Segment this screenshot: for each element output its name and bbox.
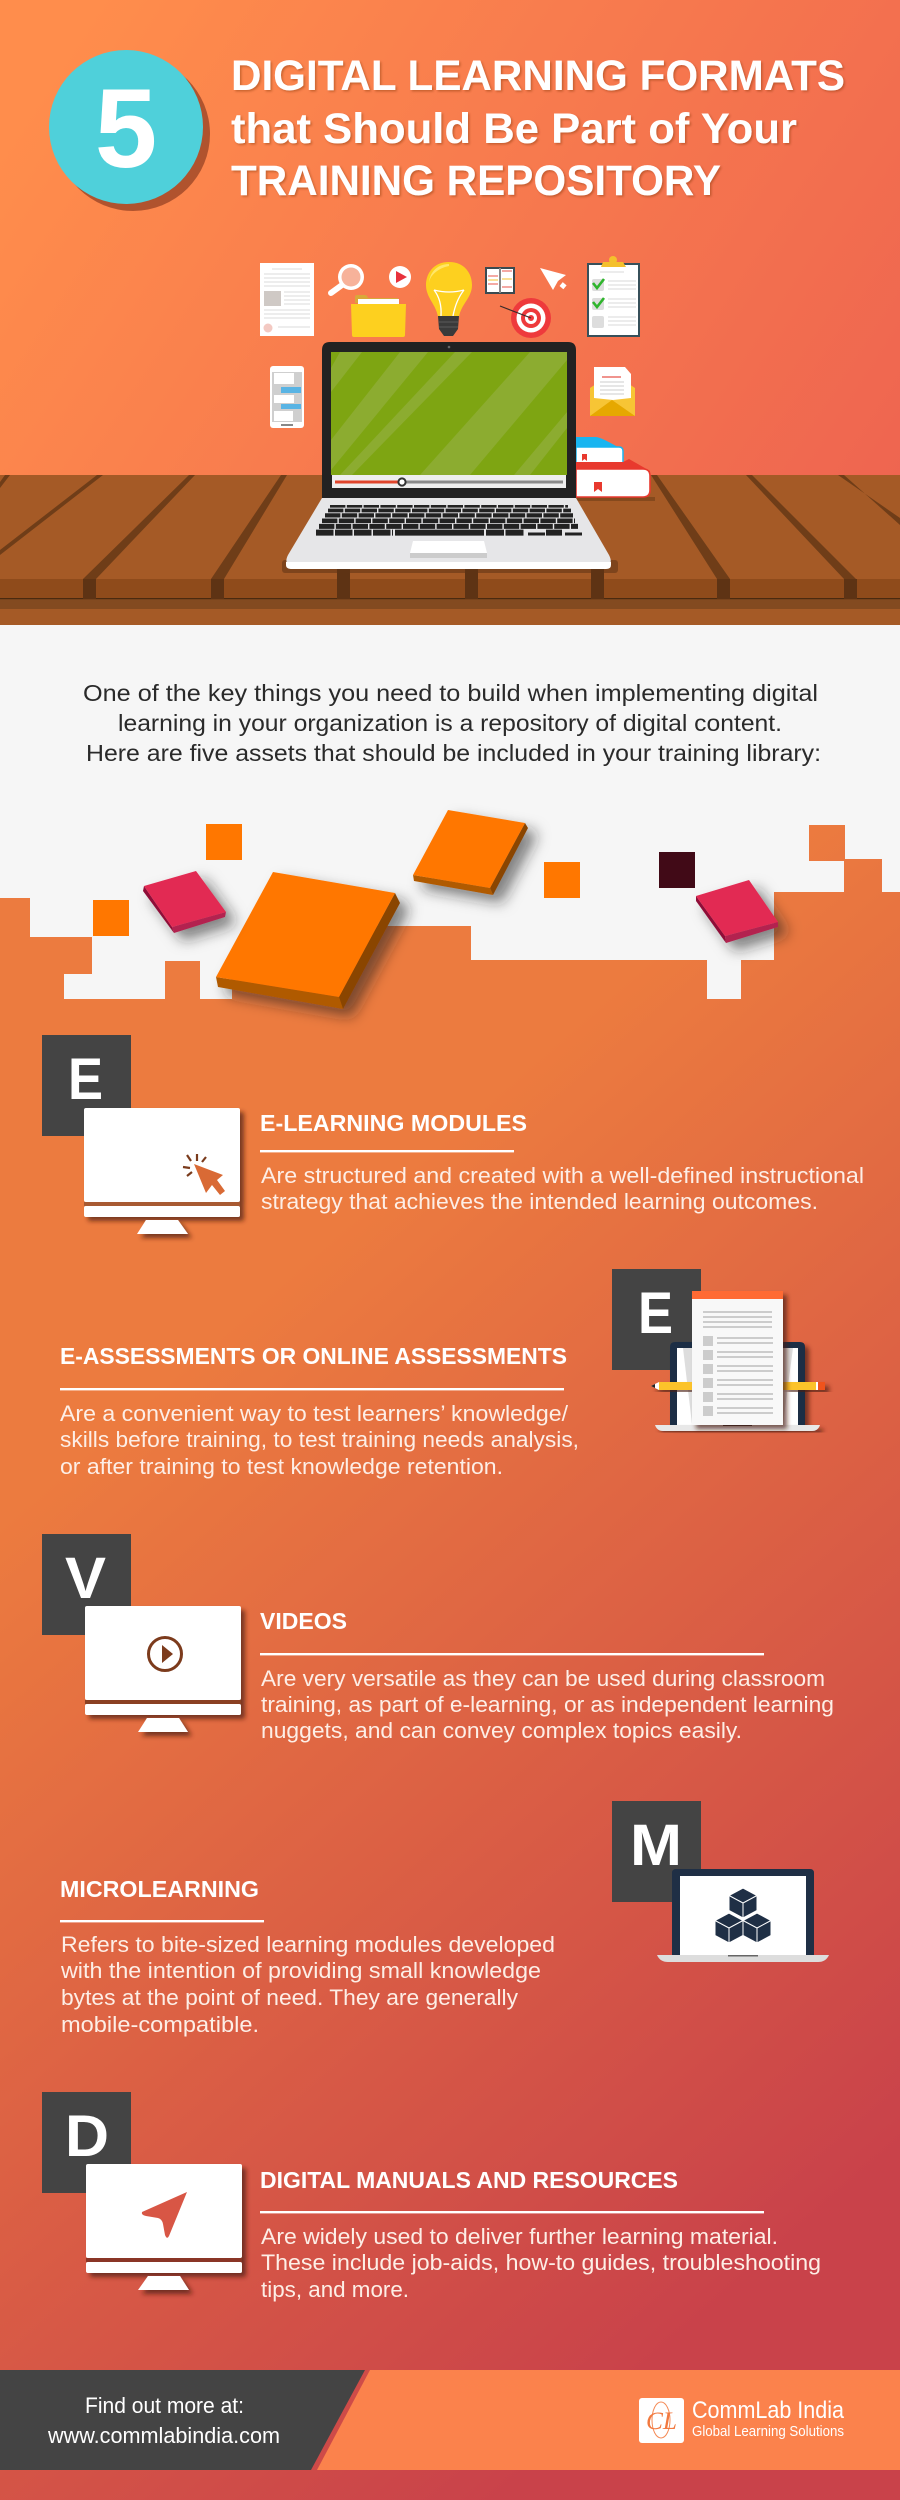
heading: E-LEARNING MODULES: [260, 1110, 527, 1136]
description: [60, 1932, 555, 2037]
letter tile E: [612, 1269, 701, 1370]
description: bytes at the point of need. They are generally: [61, 1985, 518, 2010]
description: Refers to bite-sized learning modules developed: [61, 1932, 555, 1957]
icon: open book: [486, 268, 514, 293]
description: [261, 1666, 834, 1743]
wooden desk: [0, 475, 900, 625]
title: that Should Be Part of Your: [231, 105, 797, 153]
description: strategy that achieves the intended learning outcomes.: [261, 1189, 818, 1214]
footer: call to action: [0, 2370, 365, 2470]
intro text: [83, 680, 821, 766]
3D block: large orange: [216, 872, 400, 1009]
footer: call to action: www.commlabindia.com: [47, 2423, 280, 2448]
floating squares: [93, 824, 695, 936]
description: [261, 1163, 864, 1214]
heading: E-ASSESSMENTS OR ONLINE ASSESSMENTS: [60, 1343, 567, 1369]
heading: MICROLEARNING: [60, 1876, 259, 1902]
title: [231, 52, 845, 205]
icon: cursor: [540, 268, 567, 290]
panel: digital manuals and resources: [42, 2092, 821, 2302]
3D block: pink right: [696, 880, 778, 943]
letter tile E: [42, 1035, 131, 1136]
title: TRAINING REPOSITORY: [231, 157, 721, 205]
heading: DIGITAL MANUALS AND RESOURCES: [260, 2167, 678, 2193]
letter tile M: M: [630, 1813, 682, 1878]
3D block: medium orange: [413, 810, 528, 895]
icon: laptop with video player: [282, 342, 618, 573]
description: nuggets, and can convey complex topics easily.: [261, 1718, 742, 1743]
title: DIGITAL LEARNING FORMATS: [231, 52, 845, 100]
description: [60, 1401, 579, 1479]
description: mobile-compatible.: [61, 2012, 259, 2037]
footer: logo band: [317, 2370, 900, 2470]
panel: microlearning: [60, 1801, 829, 2037]
icon: play button: [389, 266, 411, 288]
logo mark: CL: [646, 2408, 677, 2435]
panel: videos: [42, 1534, 834, 1743]
description: skills before training, to test training needs analysis,: [60, 1427, 579, 1452]
footer: call to action: Find out more at:: [85, 2393, 244, 2418]
letter tile V: V: [65, 1546, 106, 1611]
pixelated gradient panel: [0, 825, 900, 2500]
keyboard: [316, 506, 582, 534]
description: or after training to test knowledge retention.: [60, 1454, 503, 1479]
icon: smartphone: [270, 366, 304, 428]
description: Are a convenient way to test learners’ knowledge/: [60, 1401, 569, 1426]
icon: folder: [351, 295, 406, 337]
badge: number 5: 5: [95, 66, 157, 191]
description: with the intention of providing small knowledge: [60, 1958, 541, 1983]
icon: monitor with cursor: [84, 1108, 240, 1234]
logo wordmark: CommLab India: [692, 2397, 845, 2424]
letter tile V: [42, 1534, 131, 1635]
logo wordmark: [692, 2397, 845, 2440]
icon: envelope: [590, 367, 635, 416]
description: Are structured and created with a well-defined instructional: [261, 1163, 864, 1188]
icon: laptop with quiz sheet: [651, 1291, 825, 1431]
icon: light bulb: [426, 262, 472, 336]
intro text: Here are five assets that should be included in your training library:: [86, 740, 821, 766]
letter tile D: D: [65, 2104, 109, 2169]
badge: number 5: [49, 50, 210, 211]
letter tile D: [42, 2092, 131, 2193]
description: [261, 2224, 821, 2302]
description: These include job-aids, how-to guides, troubleshooting: [261, 2250, 821, 2275]
icon: clipboard: [588, 256, 639, 336]
letter tile M: [612, 1801, 701, 1902]
3D block: pink left: [143, 871, 226, 933]
logo mark: [639, 2398, 684, 2443]
icon: stack of books: [576, 437, 655, 501]
icon: target with arrow: [500, 298, 551, 338]
logo wordmark: Global Learning Solutions: [692, 2423, 844, 2440]
letter tile E: E: [638, 1281, 673, 1346]
icon: magnifier: [331, 264, 364, 293]
heading: VIDEOS: [260, 1608, 347, 1634]
icon: monitor with play button: [85, 1606, 241, 1732]
panel: e-learning modules: [42, 1035, 864, 1234]
icon: laptop with cubes: [657, 1869, 829, 1962]
description: tips, and more.: [261, 2277, 409, 2302]
description: Are widely used to deliver further learning material.: [261, 2224, 778, 2249]
intro background: [0, 625, 900, 1005]
letter tile E: E: [68, 1047, 103, 1112]
description: training, as part of e-learning, or as independent learning: [261, 1692, 834, 1717]
icon: document: [260, 263, 314, 336]
panel: e-assessments: [60, 1269, 825, 1479]
header background: [0, 0, 900, 625]
icon: monitor with navigation arrow: [86, 2164, 242, 2290]
description: Are very versatile as they can be used during classroom: [261, 1666, 825, 1691]
intro text: One of the key things you need to build when implementing digital: [83, 680, 818, 706]
intro text: learning in your organization is a repository of digital content.: [118, 710, 782, 736]
